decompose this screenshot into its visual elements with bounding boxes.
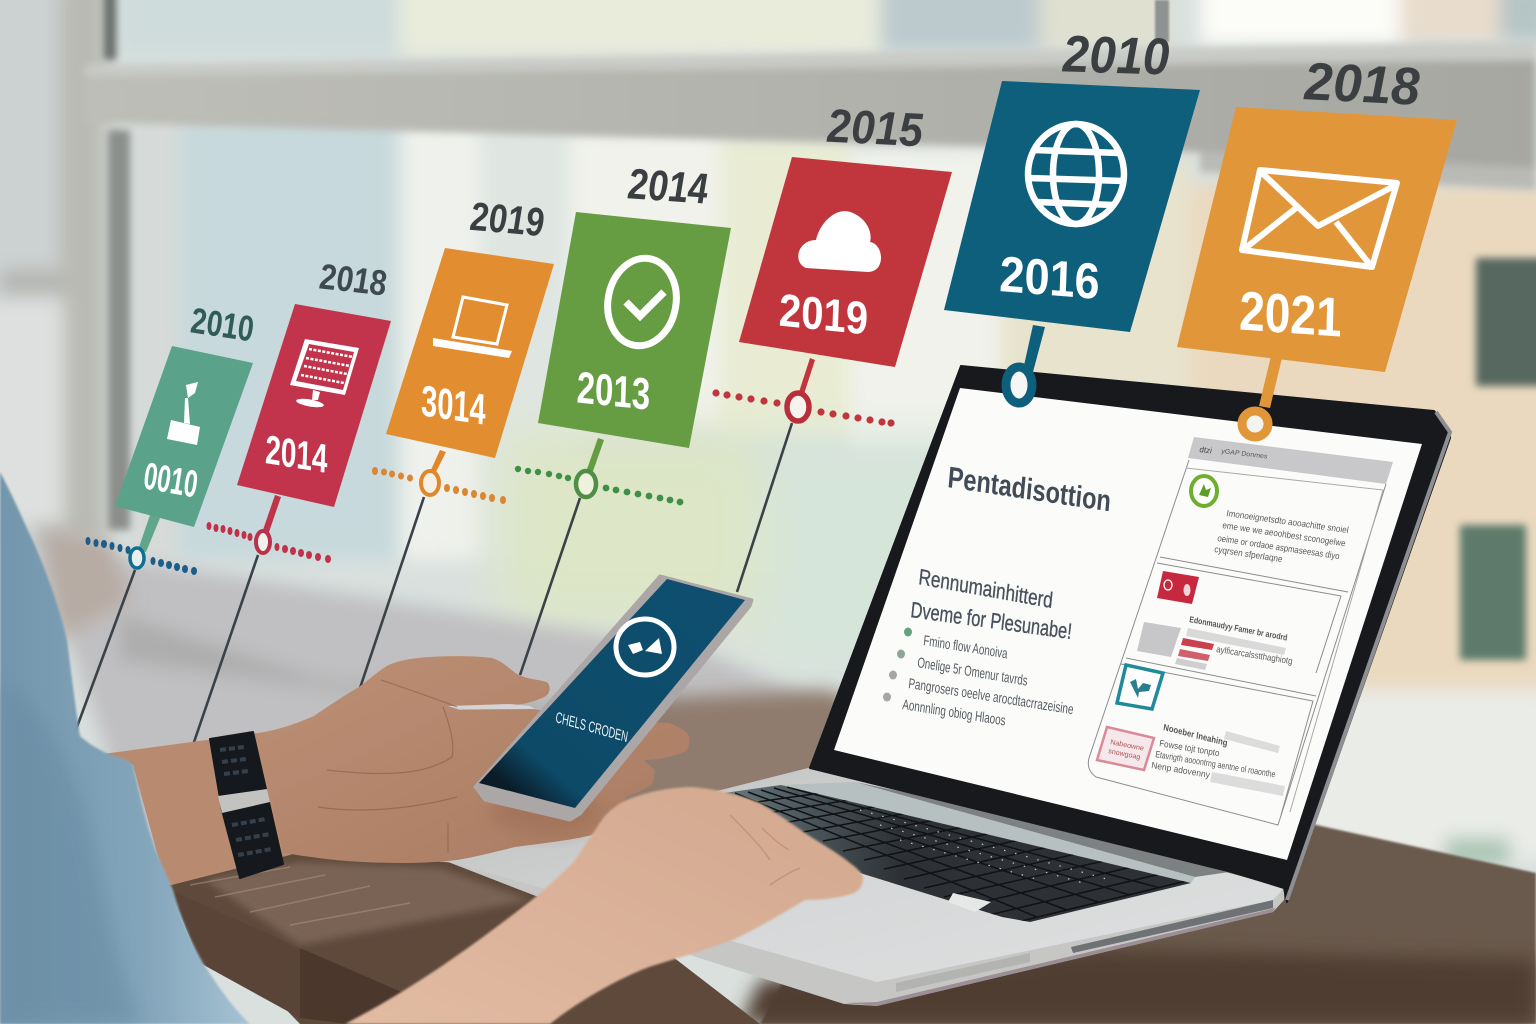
card number: 2016 [999, 247, 1101, 311]
person: left forearm [103, 733, 290, 886]
screen subheading [909, 564, 1073, 644]
laptop lid and bezel [810, 366, 1450, 902]
screen bullet list: Fmino flow Aonoiva [923, 633, 1009, 662]
screen right panel [1088, 437, 1393, 825]
timeline card 7 [1177, 52, 1457, 437]
screen bullet list: Aonnnling obiog Hlaoos [902, 697, 1006, 729]
screen subheading: Rennumainhitterd [917, 564, 1054, 613]
panel text block two: Edonmaudyy Famer br arodrd [1189, 614, 1288, 643]
card number: 3014 [420, 375, 487, 434]
year label: 2014 [627, 160, 708, 214]
phone icon [616, 619, 674, 675]
year label: 2018 [1303, 52, 1421, 117]
icon: monitor [290, 339, 359, 409]
timeline card 2 [206, 257, 391, 563]
icon: cloud [798, 211, 881, 272]
person: left hand holding phone [258, 656, 689, 863]
laptop [443, 366, 1450, 1006]
panel text block three: Nenp adovenny ag [1151, 760, 1222, 782]
laptop screen [834, 388, 1422, 860]
timeline card 1 [86, 299, 253, 575]
screen right panel: dtzi [1199, 445, 1213, 455]
year label: 2018 [319, 257, 387, 304]
wristwatch band [210, 732, 283, 878]
year label: 2015 [826, 99, 924, 157]
panel pink icon [1097, 727, 1154, 770]
card number: 2013 [576, 363, 651, 420]
year label: 2010 [1062, 25, 1170, 86]
icon: check circle [601, 253, 683, 351]
panel pink icon: snowgoag [1108, 747, 1141, 761]
panel red icon [1157, 571, 1199, 604]
icon: flag on block [167, 382, 200, 445]
panel text block one [1214, 508, 1349, 564]
laptop base [443, 768, 1284, 1006]
panel text block two [1175, 614, 1293, 670]
panel text block one: cyqrsen sfperlaqne [1214, 544, 1283, 564]
screen bullet list [883, 628, 1075, 729]
panel text block one: eme we we aeoohbest sconogelwe [1222, 520, 1346, 548]
panel text block one: Imonoeignetsdto aooachitte snoiel [1226, 508, 1349, 535]
panel icon: green badge [1191, 476, 1217, 506]
person: left sleeve [0, 472, 250, 1024]
year label: 2010 [190, 299, 253, 349]
timeline connector lines [74, 423, 792, 745]
year label: 2019 [469, 194, 544, 245]
icon: envelope [1242, 170, 1397, 267]
screen heading: Pentadisottion [946, 461, 1112, 519]
icon: laptop [433, 297, 512, 358]
card number: 2021 [1239, 280, 1342, 349]
desk [30, 525, 1536, 1024]
card number: 2014 [265, 427, 329, 482]
person: right arm and hand on keyboard [345, 787, 863, 1024]
panel text block three: Etavrigth aooontrng aentne ol roaonthe [1155, 749, 1276, 779]
panel thumbnail [1137, 622, 1181, 657]
timeline card 5 [712, 99, 952, 427]
laptop keyboard [724, 785, 1191, 925]
panel text block one: oeime or ordaoe aspmaseesas diyo [1217, 533, 1340, 561]
timeline card 4 [515, 160, 731, 505]
screen subheading: Dveme for Plesunabe! [909, 598, 1073, 644]
smartphone [475, 576, 752, 820]
panel text block three: Nooeber lneahing [1163, 722, 1228, 748]
panel text block three [1151, 722, 1285, 796]
screen bullet list: Onelige 5r Omenur tavrds [917, 655, 1028, 689]
screen bullet list: Pangrosers oeelve arocdtacrrazeisine [908, 676, 1075, 718]
screen right panel: yGAP Donmes [1221, 448, 1269, 461]
panel teal icon [1117, 665, 1163, 709]
panel text block two: aylficarcalsstthaghiotg [1216, 644, 1293, 666]
timeline card 6 [944, 25, 1200, 403]
card number: 2019 [778, 285, 869, 345]
panel pink icon: Nabeowne [1110, 738, 1145, 753]
timeline card 3 [372, 194, 554, 504]
icon: globe [1028, 124, 1124, 224]
phone text: CHELS CRODEN [554, 709, 629, 746]
card number: 0010 [143, 454, 198, 506]
panel text block three: Fowse tojt tonpto [1159, 738, 1220, 758]
